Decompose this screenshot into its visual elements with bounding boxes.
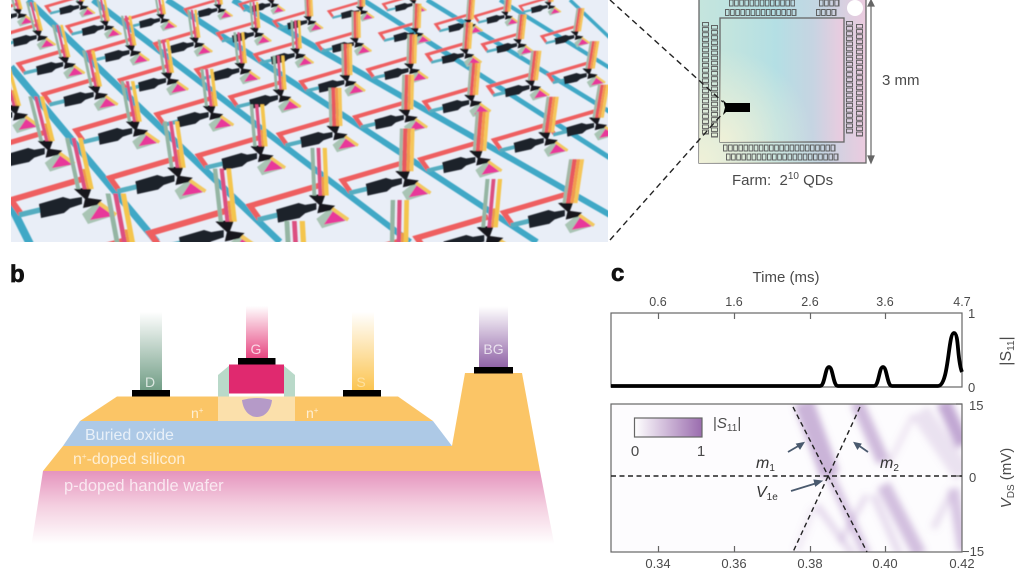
dashed guide lines: [611, 407, 962, 552]
heat map bands: [797, 402, 963, 555]
y axis title: |S: [998, 351, 1015, 366]
time axis labels: [649, 295, 971, 309]
bottom chart: S11 heat map: 1e: [767, 492, 778, 503]
layer labels: +: [199, 406, 204, 415]
gate lead: [246, 303, 268, 359]
arrows: [788, 442, 868, 491]
x tick labels: 0.42: [949, 556, 975, 571]
teal column wiring: [8, 0, 610, 244]
contact pads: [132, 358, 513, 396]
time axis labels: 2.6: [801, 295, 819, 309]
time axis title: Time (ms): [753, 269, 819, 286]
colour bar: [634, 418, 702, 437]
gate: [229, 364, 284, 394]
layer labels: -doped silicon: [87, 451, 185, 468]
layer labels: p-doped handle wafer: [64, 477, 224, 495]
top chart: S11 vs time: 0: [968, 380, 975, 395]
bottom chart: S11 heat map: 2: [893, 463, 899, 474]
panel a: 3D array of quantum dot devices: [11, 0, 608, 242]
p-doped handle wafer: [31, 471, 555, 548]
layer labels: [64, 341, 504, 495]
n++ doped silicon and back gate mesa: [43, 373, 540, 471]
bottom chart: S11 heat map: m: [880, 455, 893, 472]
panel a: farm chip: [699, 0, 866, 163]
back gate lead: [479, 303, 508, 368]
bottom chart: S11 heat map: V: [756, 484, 767, 501]
colour bar labels: 0: [631, 443, 639, 460]
panel b: device cross-section: [31, 303, 555, 548]
y axis title: |: [998, 336, 1015, 340]
time axis labels: 1.6: [725, 295, 743, 309]
chart frame: [611, 404, 962, 552]
chip inner square: [720, 18, 844, 142]
dimension arrow: 3 mm: [868, 0, 874, 163]
gate spacer: [218, 365, 295, 396]
chip caption: Farm: 2: [732, 172, 788, 189]
chip caption: QDs: [799, 172, 833, 189]
quantum dot: [242, 398, 272, 417]
layer labels: n: [73, 451, 82, 468]
chip caption: 10: [788, 171, 799, 182]
y tick labels: 15: [969, 398, 983, 413]
x tick labels: 0.40: [872, 556, 898, 571]
panel label c: c: [611, 260, 624, 287]
bottom chart: S11 heat map: 1: [697, 443, 705, 460]
buried oxide: [63, 421, 452, 446]
dimension label: 3 mm: [882, 72, 920, 89]
bottom chart: S11 heat map: |S: [713, 415, 727, 432]
y tick labels: [962, 398, 984, 559]
layer labels: n: [191, 405, 199, 421]
y axis title: 11: [1006, 340, 1017, 351]
n+ silicon layer: [80, 396, 433, 421]
x tick labels: 0.36: [721, 556, 747, 571]
channel region: [218, 396, 295, 421]
heat map background: [611, 404, 962, 552]
annotations: m: [756, 455, 769, 472]
chip bond pads: [702, 0, 863, 160]
zoom dashed lines from array to chip: [610, 0, 723, 240]
device array: [11, 0, 608, 242]
y axis title: DS: [1006, 484, 1017, 498]
time axis labels: 3.6: [876, 295, 894, 309]
time axis labels: 0.6: [649, 295, 667, 309]
y axis title: V: [998, 496, 1015, 508]
source lead: [352, 303, 374, 391]
chart frame: [611, 313, 962, 387]
bottom chart: S11 heat map: [611, 398, 1017, 571]
layer labels: S: [356, 374, 366, 390]
layer labels: Buried oxide: [85, 427, 174, 444]
gate oxide: [229, 393, 284, 396]
chip body: [699, 0, 866, 163]
layer labels: +: [82, 452, 87, 461]
top chart: S11 vs time: [611, 295, 1017, 395]
drain lead: [140, 303, 162, 391]
chip device block: [723, 100, 750, 115]
layer labels: D: [145, 374, 155, 390]
y tick labels: 1: [968, 306, 975, 321]
bottom chart: S11 heat map: 11: [727, 423, 738, 434]
chip corner marker: [847, 0, 863, 16]
y tick labels: 0: [969, 470, 976, 485]
x tick labels: 0.38: [797, 556, 823, 571]
layer labels: BG: [483, 341, 504, 357]
layer labels: +: [314, 406, 319, 415]
y tick labels: −15: [962, 544, 984, 559]
panel label b: b: [10, 261, 25, 288]
layer labels: G: [251, 341, 261, 357]
y axis title: (mV): [998, 448, 1015, 484]
bottom chart: S11 heat map: |: [737, 415, 741, 432]
x tick labels: 0.34: [645, 556, 671, 571]
layer labels: n: [306, 405, 314, 421]
x tick labels: [645, 556, 975, 571]
annotations: 1: [769, 463, 775, 474]
time axis labels: 4.7: [953, 295, 971, 309]
S11 trace: [611, 333, 962, 386]
